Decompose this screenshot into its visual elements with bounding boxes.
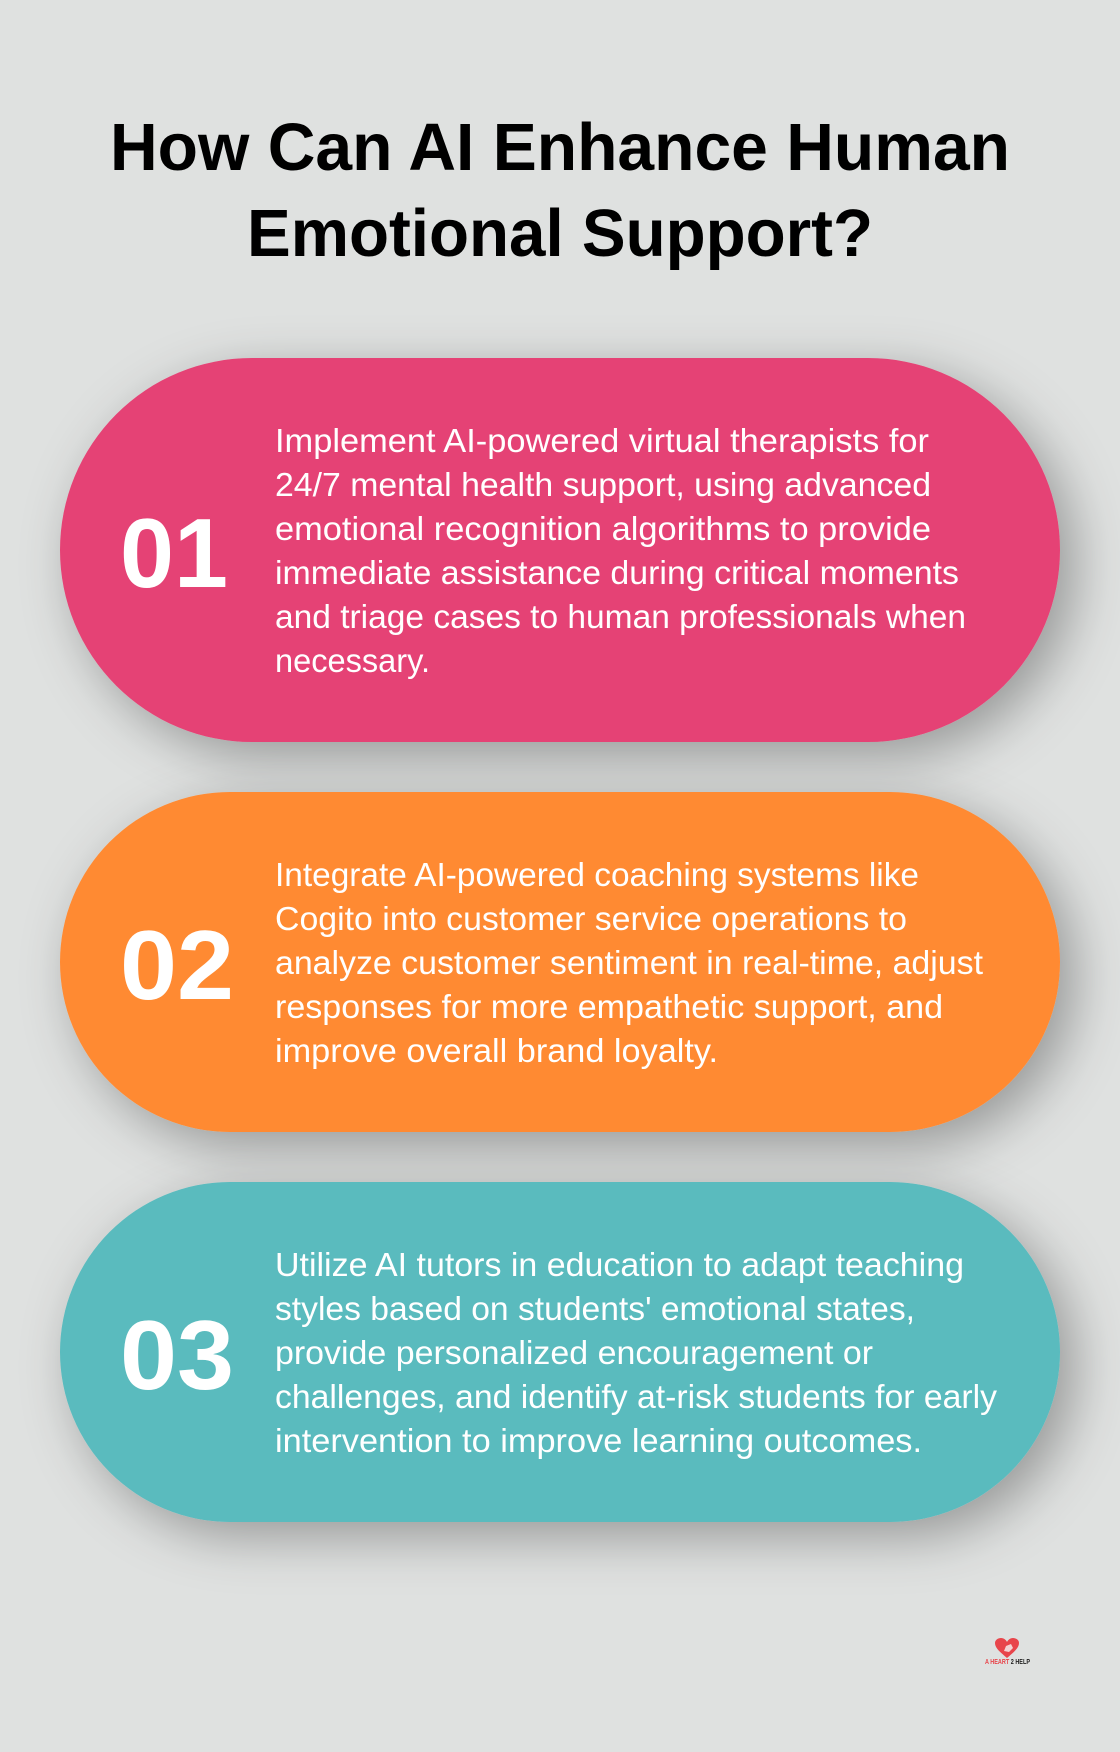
text block: step 02: responses for more empathetic support, and [275,988,943,1025]
number 01: 01 [120,498,228,608]
text block: step 03: Utilize AI tutors in education to adapt teaching [275,1246,964,1283]
icon: heart [995,1638,1019,1658]
text block: step 01: immediate assistance during critical moments [275,554,959,591]
title: Emotional Support? [247,196,873,271]
number 03: 03 [120,1300,234,1410]
text block: step 03 [275,1246,998,1459]
logo: A Heart 2 Help [985,1638,1030,1666]
text block: step 02: improve overall brand loyalty. [275,1032,718,1069]
panel: step 02 [60,792,1060,1132]
pill background: teal [60,1182,1060,1522]
panel: step 01 [60,358,1060,742]
text block: step 01: 24/7 mental health support, using advanced [275,466,931,503]
text block: step 02: analyze customer sentiment in real-time, adjust [275,944,983,981]
title [110,110,1010,271]
title: How Can AI Enhance Human [110,110,1010,185]
text block: step 01 [275,422,966,679]
text block: step 03: provide personalized encouragement or [275,1334,873,1371]
pill background: pink [60,358,1060,742]
text block: step 02: Cogito into customer service operations to [275,900,907,937]
logo wordmark: A HEART 2 HELP [985,1659,1030,1666]
panel: step 03 [60,1182,1060,1522]
text block: step 02: Integrate AI-powered coaching systems like [275,856,919,893]
text block: step 02 [275,856,983,1069]
number 02: 02 [120,910,234,1020]
pill background: orange [60,792,1060,1132]
text block: step 01: and triage cases to human professionals when [275,598,966,635]
text block: step 03: intervention to improve learning outcomes. [275,1422,922,1459]
text block: step 01: necessary. [275,642,430,679]
text block: step 03: styles based on students' emotional states, [275,1290,915,1327]
text block: step 03: challenges, and identify at-risk students for early [275,1378,998,1415]
text block: step 01: emotional recognition algorithms to provide [275,510,931,547]
text block: step 01: Implement AI-powered virtual therapists for [275,422,929,459]
